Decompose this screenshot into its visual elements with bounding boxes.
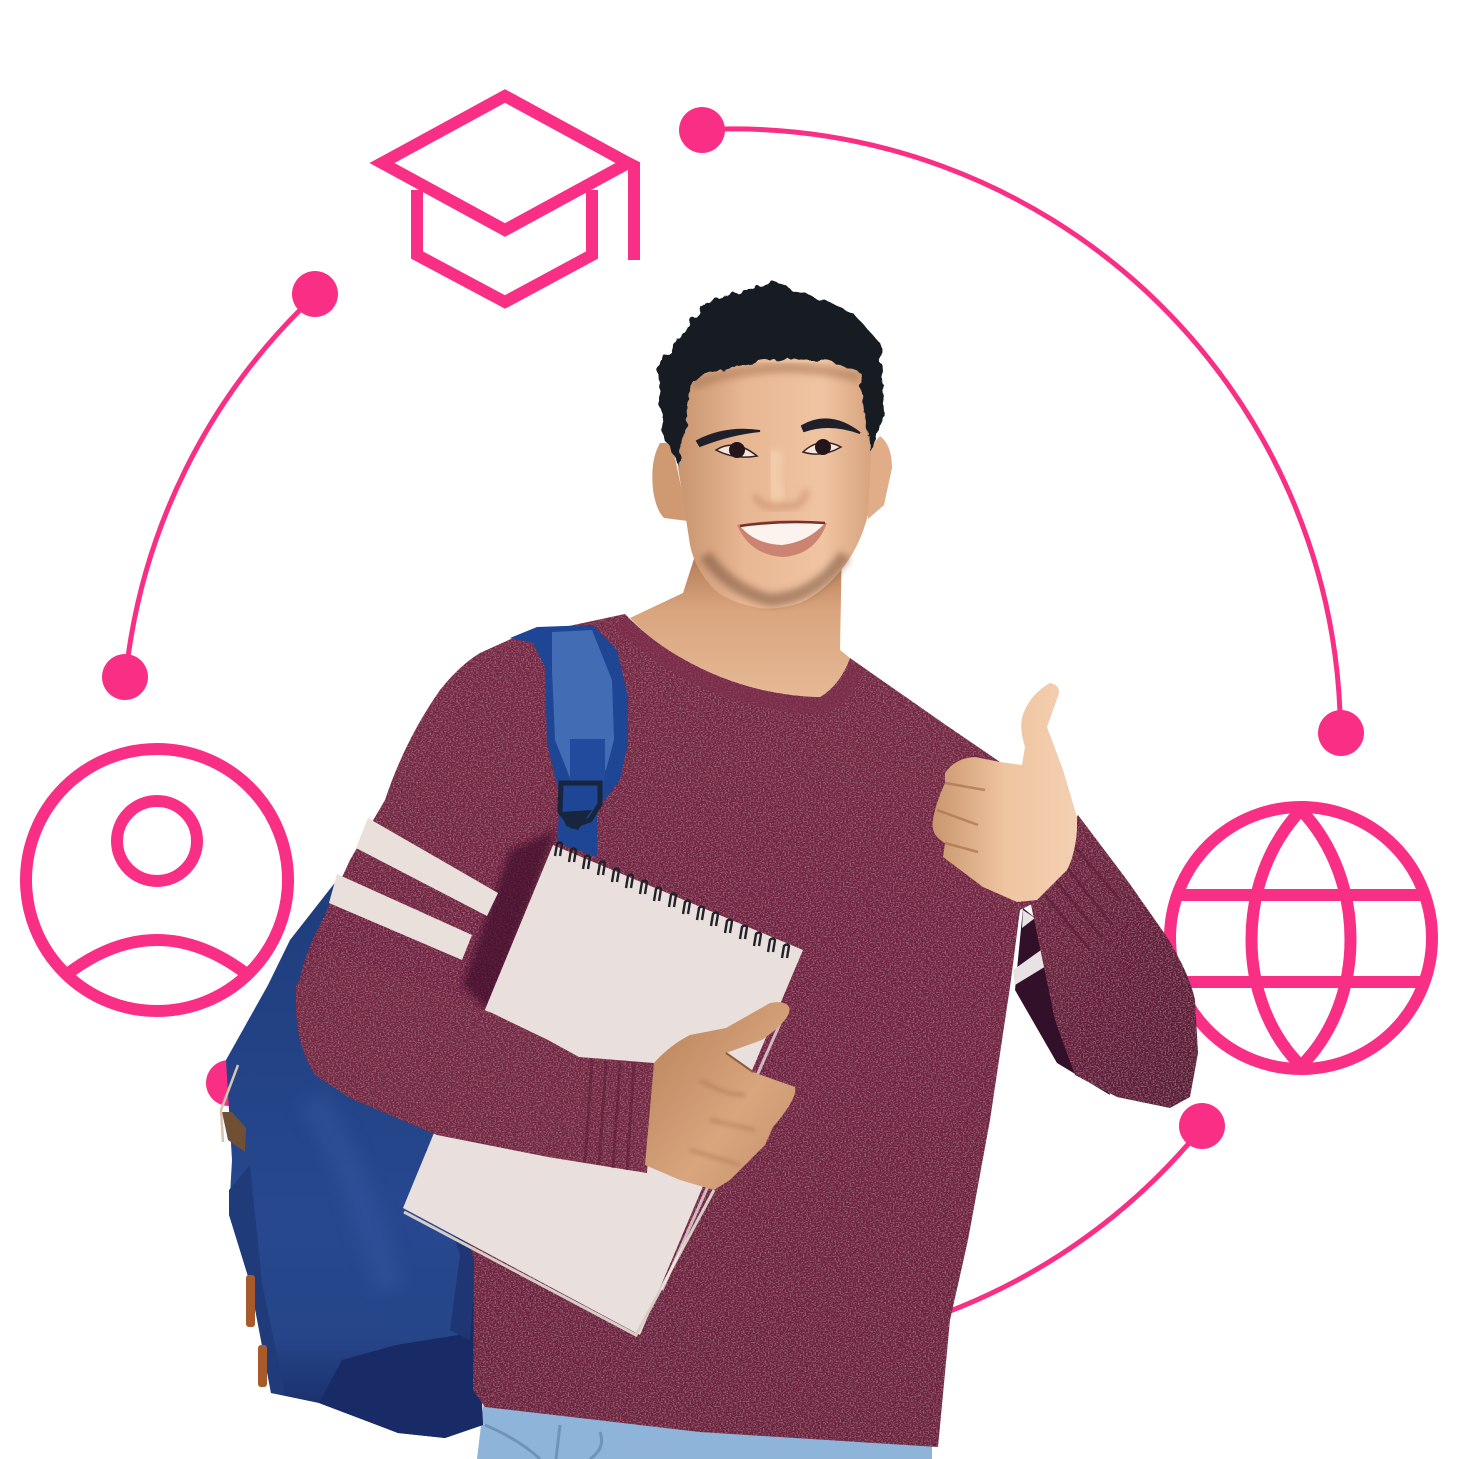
sweater sleeve stripes — [329, 818, 498, 960]
sleeve cuff ribbing — [1045, 845, 1120, 950]
student figure — [221, 282, 1198, 1459]
smile — [737, 520, 827, 557]
connector arc: bottom right — [900, 1142, 1190, 1328]
far forearm behind body — [1013, 908, 1110, 1095]
notebook — [403, 842, 803, 1335]
head — [652, 282, 892, 608]
icon: globe — [1170, 807, 1432, 1069]
right ear — [868, 436, 892, 519]
icon: graduation cap — [382, 96, 634, 302]
connector dots — [102, 107, 1364, 1149]
beard shadow — [705, 555, 845, 600]
forearm holding notebook — [296, 950, 654, 1173]
icon: user profile — [26, 749, 288, 1011]
forehead shadow under hair — [692, 368, 860, 385]
sweater body and left arm — [296, 614, 1040, 1447]
notebook spiral binding — [555, 842, 789, 958]
backpack strap — [510, 625, 628, 857]
right eye — [803, 439, 841, 455]
backpack leather straps and keyring — [221, 1065, 267, 1387]
neck — [630, 540, 850, 697]
connector arc: top left — [128, 310, 300, 657]
left eyebrow — [697, 430, 760, 446]
hair — [658, 282, 885, 467]
right sleeve — [1030, 815, 1198, 1108]
nose shadow — [755, 490, 806, 507]
right eyebrow — [802, 419, 860, 433]
left ear — [652, 443, 688, 521]
sweater collar rib — [620, 622, 857, 707]
strap buckle — [560, 783, 600, 826]
hand holding notebook — [645, 1002, 795, 1190]
left cuff ribbing — [585, 1060, 634, 1170]
backpack — [221, 880, 483, 1438]
left eye — [716, 442, 757, 458]
face — [678, 345, 871, 608]
sweater arm shading — [462, 830, 556, 1012]
jeans — [477, 1400, 932, 1459]
thumbs up hand — [932, 683, 1077, 902]
connector arc: top right — [722, 129, 1340, 712]
nose bridge and cheek light — [774, 450, 782, 500]
